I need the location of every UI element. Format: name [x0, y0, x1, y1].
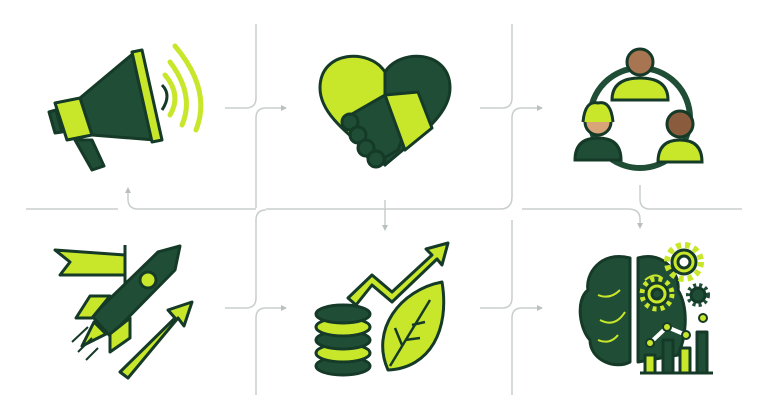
icon: brain with gears and chart: [580, 245, 713, 373]
icon: people circle: [575, 49, 702, 168]
icon: rocket: [55, 245, 192, 378]
icon: coins, growth arrow and leaf: [316, 243, 448, 375]
icon: handshake heart: [320, 56, 450, 167]
icon: megaphone: [49, 46, 201, 170]
